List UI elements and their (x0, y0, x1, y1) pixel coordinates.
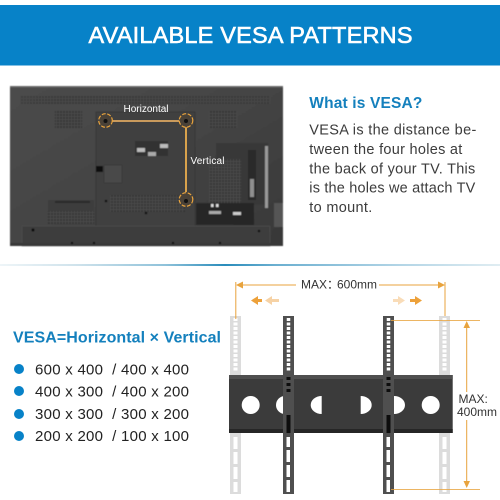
rail: left (283, 316, 294, 494)
label: 400mm (457, 405, 497, 419)
mounting line: horizontal (112, 120, 180, 122)
explanation (309, 122, 476, 216)
formula heading: VESA=Horizontal × Vertical (13, 330, 221, 346)
arrows: outward left (251, 296, 279, 305)
mounting hole: top right (179, 114, 193, 127)
panel: TV back photo (10, 86, 283, 246)
VESA sizes list (13, 330, 221, 445)
explanation: tween the four holes at (309, 142, 462, 158)
label: MAX: (458, 392, 488, 406)
mounting hole: top left (99, 114, 112, 127)
text block: what is VESA (309, 95, 476, 216)
heading: What is VESA? (309, 95, 422, 112)
bullet rows (14, 361, 189, 445)
ghost rail: left (230, 316, 241, 494)
bullet rows: 300 x 300 / 300 x 200 (35, 406, 189, 423)
explanation: to mount. (309, 200, 372, 216)
dimension: max height 400mm (391, 320, 497, 490)
mounting line: vertical (185, 127, 187, 192)
ghost rail: right (439, 316, 450, 494)
explanation: the back of your TV. This (309, 161, 475, 177)
bullet rows: 600 x 400 / 400 x 400 (35, 361, 189, 378)
rail: right (383, 316, 394, 494)
label: horizontal: Horizontal (124, 104, 168, 115)
header banner (0, 5, 500, 66)
bracket plate (229, 375, 453, 433)
explanation: is the holes we attach TV (309, 181, 476, 197)
explanation: VESA is the distance be- (309, 122, 476, 138)
label: MAX： (301, 278, 339, 292)
dimension: max width 600mm (235, 278, 446, 319)
wall mount bracket diagram (229, 316, 453, 494)
label: vertical: Vertical (190, 156, 224, 167)
mounting hole: bottom (179, 193, 193, 206)
bullet rows: 200 x 200 / 100 x 100 (35, 428, 189, 445)
label: 600mm (337, 278, 377, 292)
bullet rows: 400 x 300 / 400 x 200 (35, 384, 189, 400)
title: AVAILABLE VESA PATTERNS (88, 22, 412, 48)
arrows: outward right (393, 296, 422, 305)
